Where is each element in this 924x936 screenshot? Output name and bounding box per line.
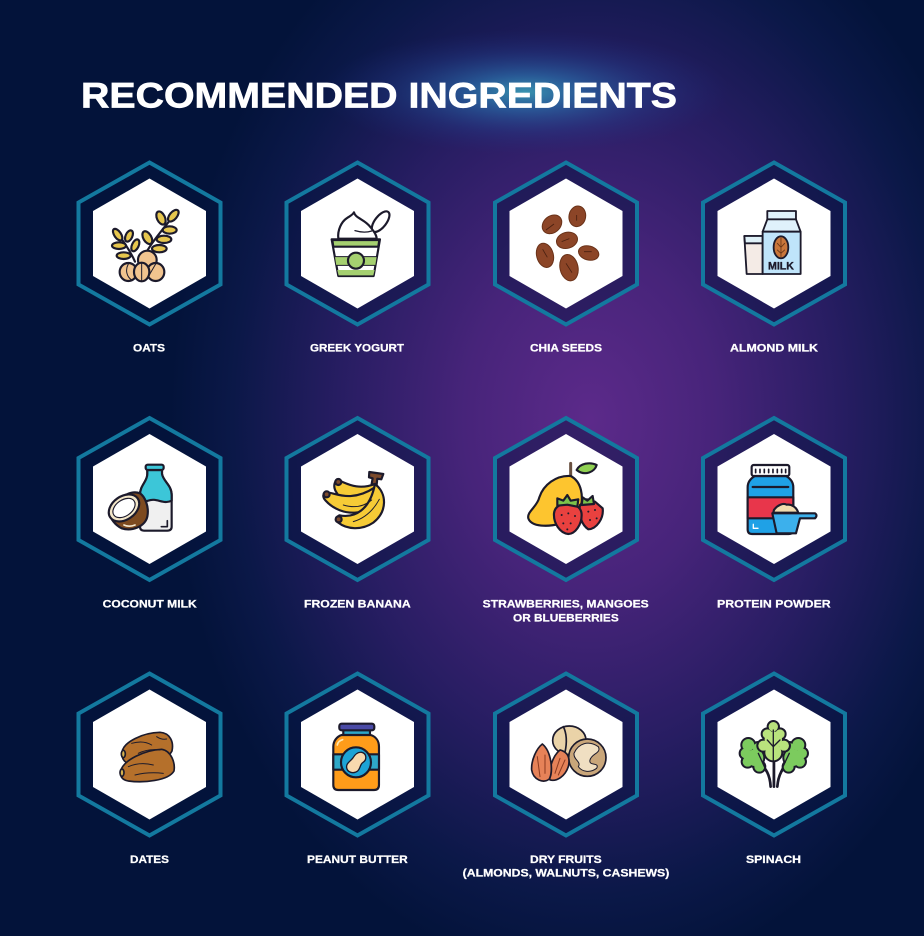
icon: spinach <box>741 722 807 787</box>
panel: oats <box>78 162 220 355</box>
icon: mango and strawberries <box>528 463 603 534</box>
label: DATES <box>130 854 169 866</box>
label <box>463 854 669 879</box>
label <box>483 599 649 624</box>
icon: milk carton and glass: MILK <box>768 260 794 272</box>
panel: greek yogurt <box>286 162 428 355</box>
icon: coconut and bottle <box>104 465 172 531</box>
icon: bananas <box>323 472 384 528</box>
panel: fruits <box>483 418 649 624</box>
panel: dry fruits <box>463 674 669 879</box>
icon: chia seeds <box>534 205 600 283</box>
label: FROZEN BANANA <box>304 599 411 611</box>
panel: coconut milk <box>78 418 220 611</box>
panel: peanut butter <box>286 674 428 866</box>
icon: nuts <box>532 726 606 781</box>
icon: milk carton and glass <box>744 211 801 274</box>
label: (ALMONDS, WALNUTS, CASHEWS) <box>463 867 669 879</box>
icon: peanut butter jar <box>333 724 379 790</box>
label: GREEK YOGURT <box>310 343 405 355</box>
icon: oats <box>111 208 181 281</box>
label: COCONUT MILK <box>103 599 197 611</box>
label: ALMOND MILK <box>730 343 818 355</box>
title: RECOMMENDED INGREDIENTS <box>81 76 677 116</box>
label: PROTEIN POWDER <box>717 599 831 611</box>
label: PEANUT BUTTER <box>307 854 408 866</box>
label: DRY FRUITS <box>530 854 602 866</box>
icon: yogurt cup <box>332 208 393 276</box>
panel: chia seeds <box>495 162 637 355</box>
label: CHIA SEEDS <box>530 343 602 355</box>
label: STRAWBERRIES, MANGOES <box>483 599 649 611</box>
panel: spinach <box>703 674 845 866</box>
panel: frozen banana <box>286 418 428 611</box>
label: OR BLUEBERRIES <box>513 612 619 624</box>
panel: protein powder <box>703 418 845 611</box>
panel: dates <box>78 674 220 866</box>
panel: almond milk <box>703 162 845 355</box>
icon: protein jar and scoop <box>748 465 816 534</box>
label: SPINACH <box>746 854 801 866</box>
icon: dates <box>120 732 174 782</box>
label: OATS <box>133 343 165 355</box>
